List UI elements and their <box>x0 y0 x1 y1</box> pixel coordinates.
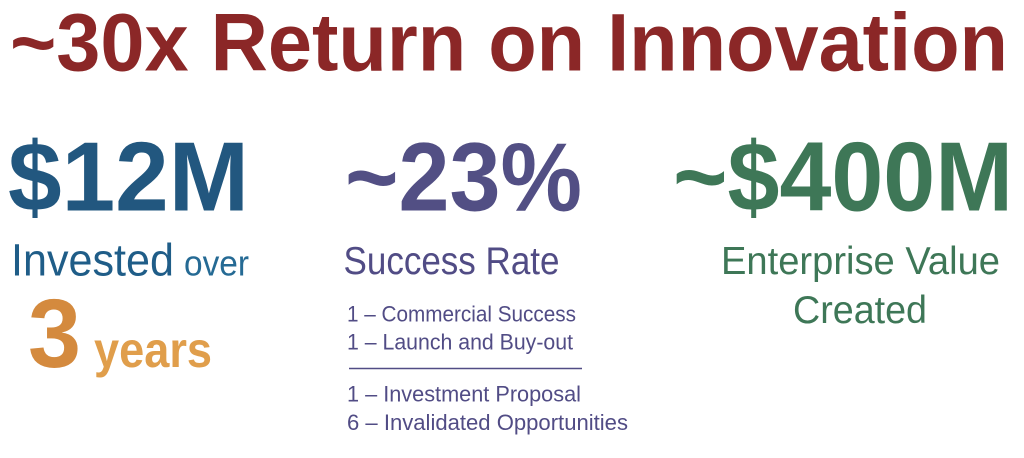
list item: 1 – Investment Proposal <box>347 382 581 406</box>
label: created: Created <box>793 289 927 332</box>
stat: ~$400M: ~$400M <box>673 122 1013 232</box>
stat: $12M: $12M <box>8 122 249 232</box>
list item: 1 – Commercial Success <box>347 302 576 326</box>
label: invested: Invested <box>11 234 174 286</box>
label: enterprise value: Enterprise Value <box>721 240 1000 283</box>
label: over: over <box>184 242 249 284</box>
panel: enterprise value <box>673 122 1013 332</box>
stat: ~23%: ~23% <box>345 122 582 232</box>
label: success rate: Success Rate <box>344 240 560 283</box>
panel: investment <box>8 122 249 388</box>
stat: 3: 3 <box>28 279 81 388</box>
list item: 6 – Invalidated Opportunities <box>347 410 628 435</box>
list item: 1 – Launch and Buy-out <box>347 330 573 354</box>
label: years: years <box>94 322 212 378</box>
panel: success rate <box>344 122 628 435</box>
